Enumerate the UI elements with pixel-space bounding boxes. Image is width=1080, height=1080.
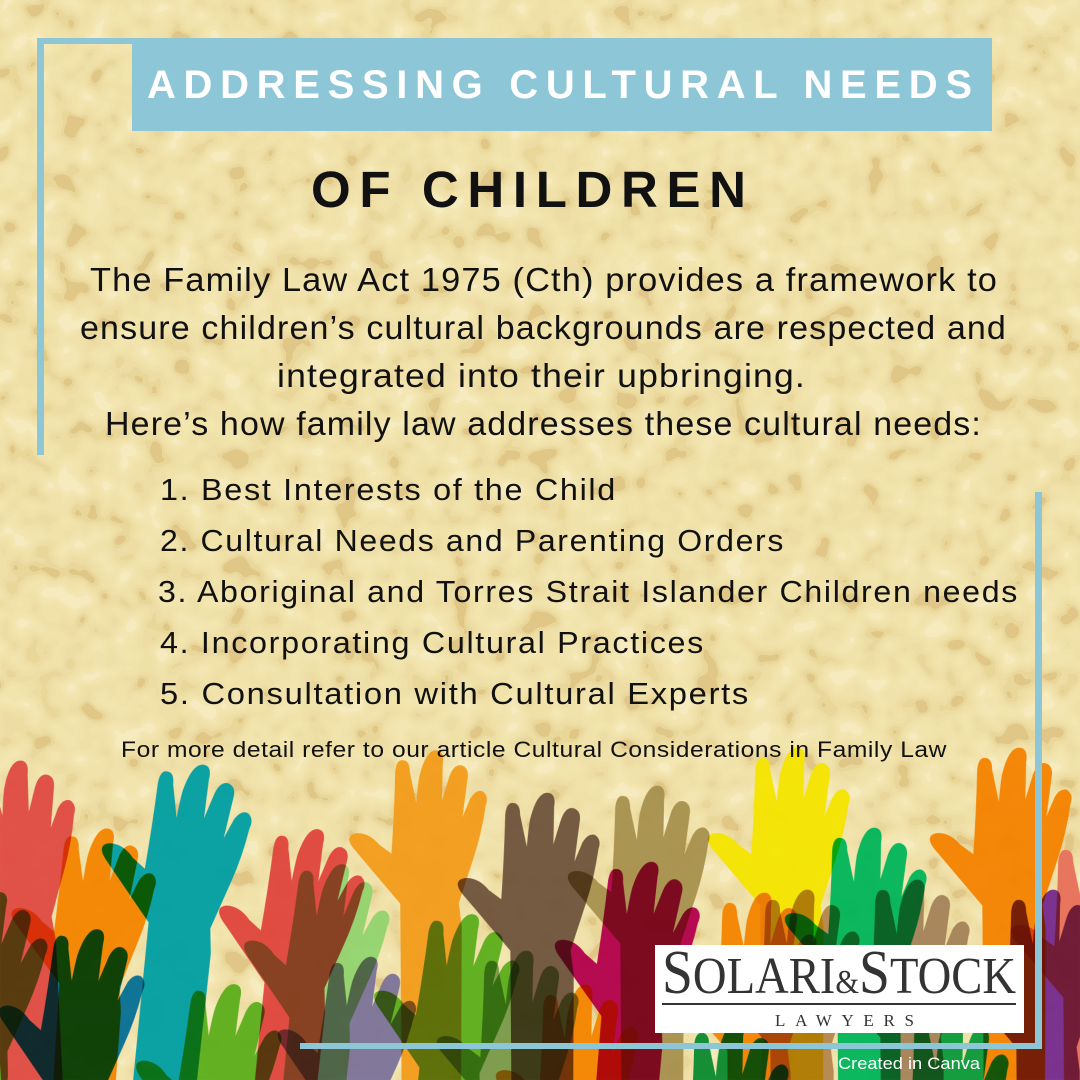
hand: tan [550,773,750,1080]
hand: blue lower left [0,915,195,1080]
hand: purple [947,877,1080,1080]
numbered list: 2. Cultural Needs and Parenting Orders [160,523,785,558]
numbered list [158,472,1019,711]
frame: top-left blue corner [37,38,132,455]
hand: teal [60,750,300,1080]
watermark: Created in Canva: Created in Canva [838,1054,981,1073]
hand: emerald [770,815,970,1080]
logo wordmark: SOLARI&STOCK [662,939,1016,1007]
hand: green lower left [92,970,332,1080]
frame: bottom-right blue corner [300,492,1042,1049]
hand: salmon [994,827,1080,1080]
hand: green far left [0,878,100,1080]
intro paragraph: ensure children’s cultural backgrounds are respected and [80,309,1007,346]
reference note: For more detail refer to our article Cultural Considerations in Family Law [121,737,947,762]
title banner [132,38,992,131]
hand: orange right [913,735,1080,1080]
hand: orange small [660,880,860,1080]
hand: brown [440,780,640,1080]
hand: tan small [700,877,900,1080]
intro paragraph: The Family Law Act 1975 (Cth) provides a framework to [90,261,998,298]
hand: light green [200,850,440,1080]
illustration: raised multicoloured hands [0,733,1080,1080]
hand: green bottom [630,1010,830,1080]
numbered list: 3. Aboriginal and Torres Strait Islander Children needs [158,574,1019,609]
intro paragraph: Here’s how family law addresses these cultural needs: [105,405,982,442]
logo: Solari & Stock Lawyers [655,939,1024,1033]
hand: green lower middle [420,938,620,1080]
hand: red centre left [175,815,415,1080]
hand: tan right [810,867,1010,1080]
numbered list: 5. Consultation with Cultural Experts [160,676,750,711]
logo subtitle: LAWYERS [775,1011,914,1030]
intro paragraph: integrated into their upbringing. [277,357,806,394]
hand: orange lower middle [480,972,680,1080]
hand: red far left [0,748,142,1080]
hand: crimson [512,848,752,1080]
title line 2: OF CHILDREN [311,161,746,218]
intro paragraph [80,261,1007,442]
hand: slate purple [230,935,470,1080]
numbered list: 1. Best Interests of the Child [160,472,617,507]
hand: amber [330,733,530,1080]
numbered list: 4. Incorporating Cultural Practices [160,625,705,660]
hand: yellow [690,735,890,1080]
title line 1: ADDRESSING CULTURAL NEEDS [147,63,972,107]
hand: green centre [330,900,570,1080]
hand: green bottom right [850,1000,1050,1080]
hand: orange left [0,815,210,1080]
